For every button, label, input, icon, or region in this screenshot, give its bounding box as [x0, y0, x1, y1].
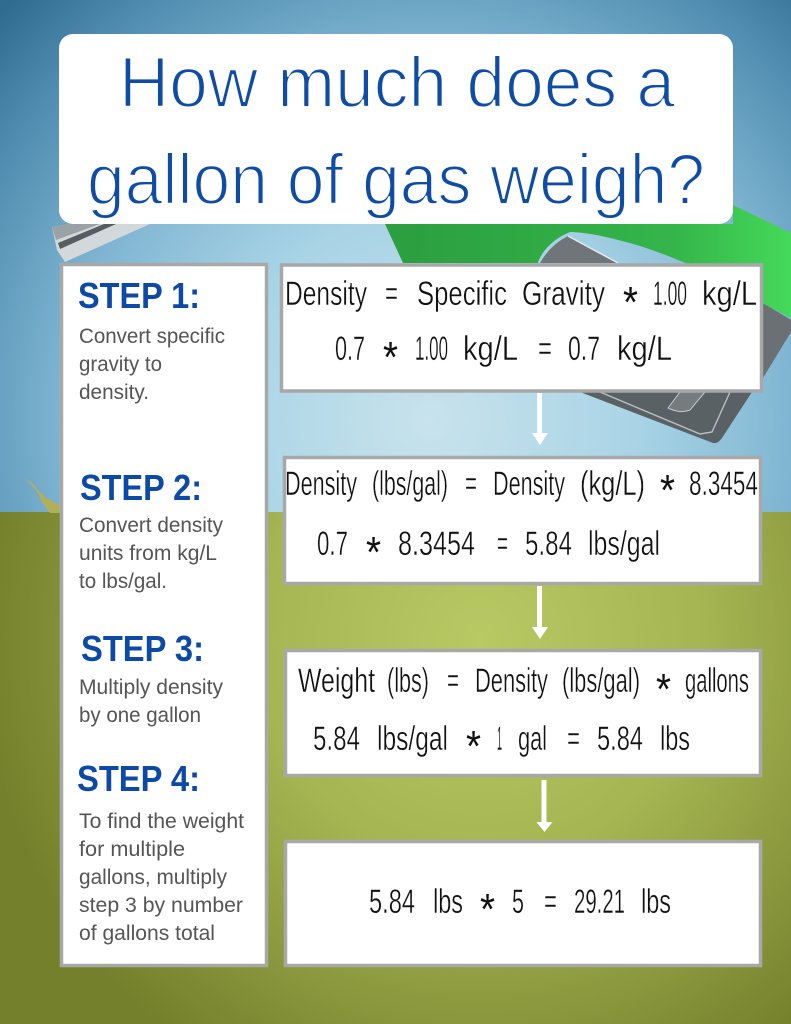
panel: formula box 2 — [284, 458, 760, 584]
formula 3 line 1: = — [447, 662, 459, 700]
arrow 3 to 4 — [536, 780, 552, 832]
formula 2 line 1: (lbs/gal) — [372, 465, 448, 503]
step 3 text: Multiply density — [79, 676, 223, 699]
formula 3 line 1: Density — [475, 662, 548, 700]
formula 3 line 2: 1 — [497, 720, 502, 758]
formula 4: 29.21 — [574, 883, 625, 921]
step 4 text — [79, 810, 244, 945]
formula 2 line 1: Density — [285, 465, 357, 503]
arrow 2 to 3 — [532, 586, 548, 639]
formula 1 line 2: = — [538, 330, 552, 368]
formula 4: * — [480, 885, 495, 934]
formula 1 line 2: kg/L — [463, 330, 518, 368]
step 3 text: by one gallon — [79, 704, 201, 727]
arrow 1 to 2 — [532, 393, 548, 445]
formula 3 line 1: * — [656, 665, 671, 714]
formula 3 line 2: gal — [518, 720, 547, 758]
formula 1 line 1: Density — [285, 275, 367, 313]
icon: fuel splash — [24, 477, 60, 513]
formula 2 line 1: Density — [493, 465, 565, 503]
formula 2 line 2: 8.3454 — [398, 525, 475, 563]
step 4 text: step 3 by number — [79, 894, 243, 917]
formula 3 line 1: Weight — [298, 662, 375, 700]
title panel — [59, 34, 733, 224]
panel: formula box 1 — [282, 265, 762, 391]
formula 2 line 2: = — [497, 525, 508, 563]
step 4 text: To find the weight — [79, 810, 244, 833]
formula 4: 5.84 — [369, 883, 415, 921]
formula 1 line 2: 1.00 — [415, 330, 448, 368]
step 3 text — [79, 676, 223, 727]
step 1 text: Convert specific — [79, 325, 225, 348]
step 1 text: gravity to — [79, 353, 162, 376]
formula 2 line 1: * — [660, 466, 675, 515]
formula 3 line 2: lbs — [660, 720, 690, 758]
formula 1 line 1: 1.00 — [653, 275, 687, 313]
icon: fuel nozzle — [52, 205, 791, 443]
formula 4 — [369, 883, 671, 934]
title line 2: gallon of gas weigh? — [87, 141, 705, 220]
formula 1 line 2: * — [383, 333, 398, 382]
formula 1 line 2: kg/L — [617, 330, 672, 368]
formula 1 line 1: Gravity — [522, 275, 605, 313]
formula 4: lbs — [433, 883, 463, 921]
formula 3 line 1: gallons — [685, 662, 749, 700]
formula 2 line 2: lbs/gal — [588, 525, 660, 563]
formula 1 line 1 — [285, 275, 757, 327]
step 4 text: for multiple — [79, 838, 185, 861]
formula 4: lbs — [641, 883, 671, 921]
formula 2 line 1: 8.3454 — [689, 465, 758, 503]
formula 3 line 1: (lbs) — [387, 662, 429, 700]
formula 3 line 2: 5.84 — [597, 720, 643, 758]
formula 3 line 1: (lbs/gal) — [562, 662, 640, 700]
formula 1 line 2: 0.7 — [568, 330, 600, 368]
step 4 text: gallons, multiply — [79, 866, 227, 889]
background: sky — [0, 0, 791, 512]
step 2 heading: STEP 2: — [80, 467, 202, 508]
step 1 text — [79, 325, 225, 404]
step 4 heading: STEP 4: — [77, 758, 200, 799]
formula 1 line 1: kg/L — [702, 275, 757, 313]
formula 1 line 1: * — [623, 278, 638, 327]
formula 2 line 2: 0.7 — [317, 525, 348, 563]
formula 3 line 2: * — [466, 722, 481, 771]
formula 2 line 2: 5.84 — [525, 525, 572, 563]
formula 4: 5 — [512, 883, 524, 921]
formula 2 line 1: (kg/L) — [580, 465, 645, 503]
formula 1 line 1: = — [385, 275, 398, 313]
formula 3 line 2: lbs/gal — [377, 720, 448, 758]
step 2 text — [79, 514, 223, 593]
step 2 text: to lbs/gal. — [79, 570, 167, 593]
formula 2 line 2: * — [366, 528, 381, 577]
formula 3 line 2: = — [567, 720, 580, 758]
background: ground — [0, 512, 791, 1024]
step 4 text: of gallons total — [79, 922, 215, 945]
step 3 heading: STEP 3: — [81, 628, 204, 669]
step 1 text: density. — [79, 381, 149, 404]
panel: steps — [62, 264, 266, 966]
title line 1: How much does a — [119, 44, 675, 123]
panel: formula box 4 — [286, 842, 760, 966]
formula 3 line 2: 5.84 — [313, 720, 360, 758]
formula 2 line 1: = — [465, 465, 477, 503]
formula 2 line 2 — [317, 525, 660, 577]
formula 1 line 2 — [335, 330, 672, 382]
formula 1 line 1: Specific — [417, 275, 507, 313]
formula 2 line 1 — [285, 465, 758, 515]
step 1 heading: STEP 1: — [78, 275, 200, 316]
step 2 text: units from kg/L — [79, 542, 217, 565]
formula 3 line 1 — [298, 662, 749, 714]
step 2 text: Convert density — [79, 514, 223, 537]
panel: formula box 3 — [286, 650, 760, 776]
formula 4: = — [544, 883, 557, 921]
formula 1 line 2: 0.7 — [335, 330, 365, 368]
formula 3 line 2 — [313, 720, 690, 771]
